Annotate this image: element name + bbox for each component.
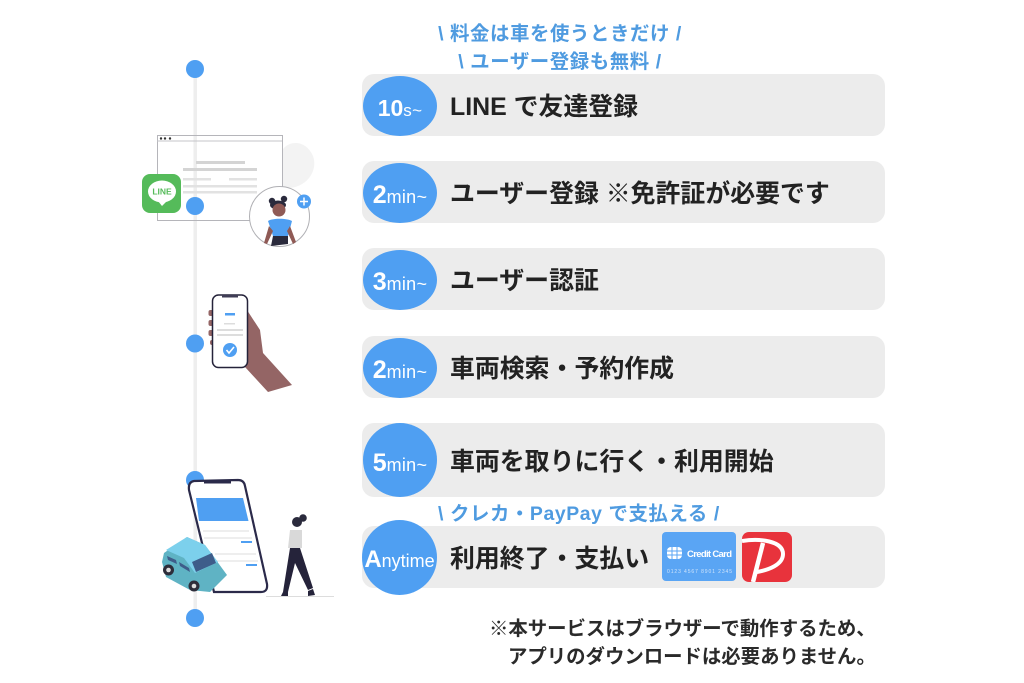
icon: LINE: LINE xyxy=(152,186,172,196)
step 2: ユーザー登録 ※免許証が必要です xyxy=(450,180,830,208)
step 4 xyxy=(362,336,885,398)
step 5: 車両を取りに行く・利用開始 xyxy=(450,448,774,476)
icon: credit card: Credit Card xyxy=(687,549,732,560)
step 6: 利用終了・支払い xyxy=(450,545,649,573)
icon: user avatar xyxy=(250,186,311,246)
step 2: 2min~ xyxy=(373,181,427,209)
step 2 xyxy=(362,161,885,223)
step 4: 車両検索・予約作成 xyxy=(450,355,674,383)
footnote: アプリのダウンロードは必要ありません。 xyxy=(508,646,876,668)
step 6: Anytime xyxy=(364,546,435,573)
illustration: LINE registration xyxy=(142,136,314,246)
step 5: 5min~ xyxy=(373,449,427,477)
heading: free registration note: \ ユーザー登録も無料 / xyxy=(458,51,662,73)
footnote: ※本サービスはブラウザーで動作するため、 xyxy=(489,618,876,640)
icon: PayPay xyxy=(742,532,792,582)
icon: LINE xyxy=(142,174,181,213)
illustration: phone in hand xyxy=(208,295,292,392)
footnote xyxy=(489,618,876,668)
timeline line xyxy=(194,68,197,618)
step 1: 10s~ xyxy=(378,95,422,121)
step 4: 2min~ xyxy=(373,356,427,384)
heading: free registration note xyxy=(438,23,682,73)
step 3: 3min~ xyxy=(373,268,427,296)
timeline dots xyxy=(186,60,204,627)
payment note: \ クレカ・PayPay で支払える / xyxy=(438,503,720,525)
step 3: ユーザー認証 xyxy=(450,267,599,295)
heading: free registration note: \ 料金は車を使うときだけ / xyxy=(438,23,682,45)
icon: credit card: 0123 4567 8901 2345 xyxy=(667,569,732,575)
step 1: LINE で友達登録 xyxy=(450,93,638,121)
icon: credit card xyxy=(662,532,736,581)
illustration: phone, car and person xyxy=(162,480,334,597)
step 1 xyxy=(362,74,885,136)
step 6 xyxy=(362,520,885,595)
step 5 xyxy=(362,423,885,497)
step 3 xyxy=(362,248,885,310)
